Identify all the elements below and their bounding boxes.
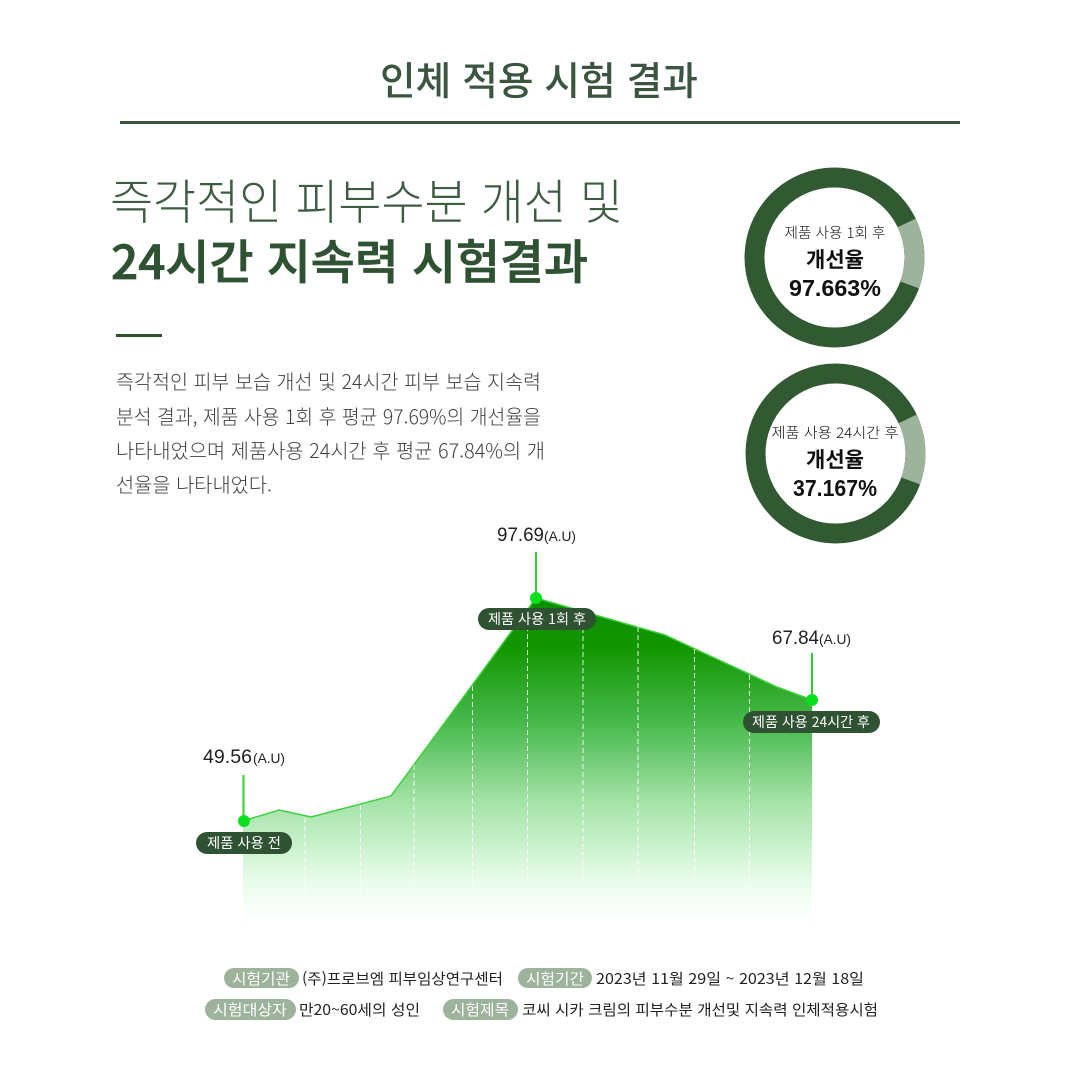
study title value: 코씨 시카 크림의 피부수분 개선및 지속력 인체적용시험	[522, 999, 878, 1020]
donut: after 24 hours	[756, 374, 916, 534]
heading: 즉각적인 피부수분 개선 및	[110, 163, 623, 233]
marker: before use: (A.U)	[253, 750, 285, 766]
marker: before use	[196, 747, 292, 854]
tag: title: 시험제목	[451, 999, 509, 1020]
subjects value: 만20~60세의 성인	[299, 999, 420, 1020]
donut: after 1 use	[754, 178, 915, 338]
marker: after 24 hours: 제품 사용 24시간 후	[752, 712, 870, 732]
marker: before use: 49.56	[203, 747, 252, 768]
donut: after 1 use: 제품 사용 1회 후	[784, 222, 886, 243]
period value: 2023년 11월 29일 ~ 2023년 12월 18일	[596, 968, 864, 989]
area chart	[196, 525, 880, 920]
marker: after 1 use: 제품 사용 1회 후	[488, 609, 586, 629]
donut: after 1 use: 개선율	[806, 244, 864, 274]
short divider	[116, 334, 162, 337]
heading	[110, 163, 623, 293]
donut: after 1 use: 97.663%	[789, 275, 881, 301]
marker: after 1 use: 97.69	[497, 525, 544, 546]
gradient area	[243, 598, 812, 920]
donut: after 24 hours: 37.167%	[793, 475, 877, 501]
study info footer	[205, 968, 878, 1020]
institution value: (주)프로브엠 피부임상연구센터	[302, 968, 503, 989]
donut: after 24 hours: 개선율	[806, 444, 864, 474]
marker: after 24 hours: 67.84	[772, 628, 819, 649]
area top line	[243, 598, 812, 821]
body text: 분석 결과, 제품 사용 1회 후 평균 97.69%의 개선율을	[116, 401, 541, 430]
dashed guides	[305, 610, 750, 905]
marker: after 1 use	[478, 525, 596, 630]
tag: period: 시험기간	[526, 968, 584, 989]
body text	[116, 366, 545, 498]
body text: 선율을 나타내었다.	[116, 469, 272, 498]
body text: 즉각적인 피부 보습 개선 및 24시간 피부 보습 지속력	[116, 366, 541, 395]
marker: after 1 use: (A.U)	[544, 528, 576, 544]
tag: subjects: 시험대상자	[213, 999, 287, 1020]
marker: after 24 hours	[743, 628, 880, 733]
tag: institution: 시험기관	[232, 968, 290, 989]
body text: 나타내었으며 제품사용 24시간 후 평균 67.84%의 개	[116, 435, 545, 464]
donut: after 24 hours: 제품 사용 24시간 후	[772, 422, 898, 443]
marker: before use: 제품 사용 전	[207, 833, 281, 853]
marker: after 24 hours: (A.U)	[819, 631, 851, 647]
title: 인체 적용 시험 결과	[380, 51, 698, 107]
title	[120, 51, 960, 124]
heading: 24시간 지속력 시험결과	[111, 224, 588, 293]
